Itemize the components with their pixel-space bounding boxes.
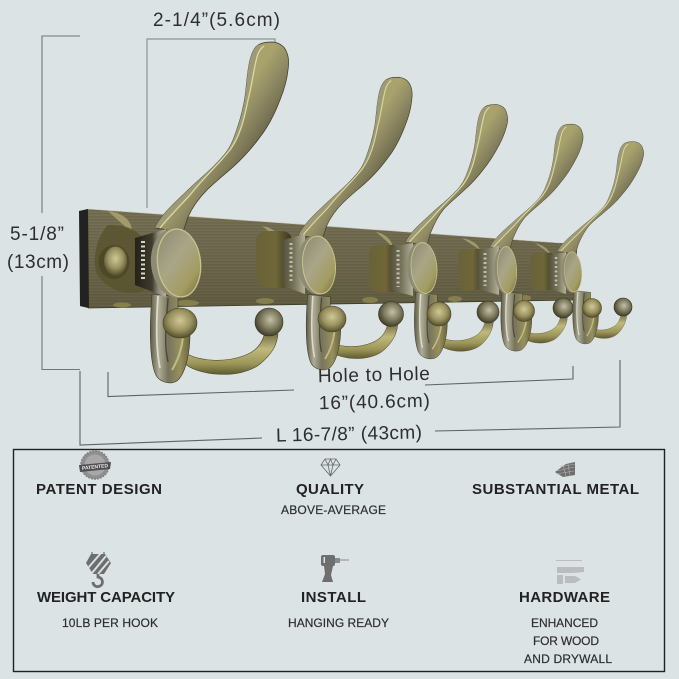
collar (390, 243, 413, 296)
feature: weight capacity (37, 552, 175, 630)
feature: weight capacity: WEIGHT CAPACITY (37, 589, 175, 606)
feature: hardware (519, 560, 612, 666)
dimension: height 5-1/8 inch: 5-1/8” (10, 224, 64, 245)
collar (477, 246, 499, 295)
icon: diamond (321, 459, 340, 476)
feature: hardware: HARDWARE (519, 589, 610, 606)
hook 2 (256, 77, 412, 370)
feature: hardware: ENHANCED (531, 616, 598, 630)
dimension: hole to hole 16 inch: Hole to Hole (318, 364, 430, 387)
feature: install: HANGING READY (288, 616, 389, 630)
dimension: hole to hole 16 inch (108, 364, 573, 414)
feature: quality: ABOVE-AVERAGE (281, 503, 386, 517)
dimension: height 5-1/8 inch (7, 36, 80, 370)
collar (135, 229, 166, 297)
feature: substantial metal: SUBSTANTIAL METAL (472, 481, 639, 498)
hook 5 (530, 142, 644, 344)
feature: hardware: AND DRYWALL (524, 652, 612, 666)
icon: patented badge: PATENTED (82, 463, 109, 472)
feature: install (288, 555, 389, 630)
features panel (14, 450, 664, 672)
rail mounting bosses (113, 295, 531, 308)
icon: power drill (321, 555, 349, 582)
feature: patent design (36, 451, 162, 498)
feature: substantial metal (472, 462, 639, 498)
hook rail plate (79, 209, 577, 308)
icon: screws and anchors (556, 560, 584, 584)
hook 1 with mounting peg (95, 42, 289, 383)
dimension: hook width 2-1/4 inch: 2-1/4”(5.6cm) (153, 10, 280, 31)
hook 4 (458, 124, 583, 351)
dimension: hole to hole 16 inch: 16”(40.6cm) (319, 391, 430, 414)
collar (283, 234, 305, 294)
dimension: overall length 16-7/8 inch (80, 360, 620, 447)
dimension: hook width 2-1/4 inch (147, 10, 280, 208)
dimension: height 5-1/8 inch: (13cm) (7, 252, 69, 273)
collar (549, 252, 566, 294)
feature: patent design: PATENT DESIGN (36, 481, 162, 498)
feature: weight capacity: 10LB PER HOOK (62, 616, 158, 630)
feature: quality (281, 459, 386, 517)
hook 3 (369, 104, 508, 359)
feature: quality: QUALITY (296, 481, 364, 498)
feature: install: INSTALL (301, 589, 366, 606)
icon: metal mesh (555, 462, 575, 477)
dimension: overall length 16-7/8 inch: L 16-7/8” (43cm) (276, 422, 422, 447)
feature: hardware: FOR WOOD (533, 634, 599, 648)
icon: crane hook (86, 552, 111, 587)
mounting peg and shadow (95, 211, 145, 293)
